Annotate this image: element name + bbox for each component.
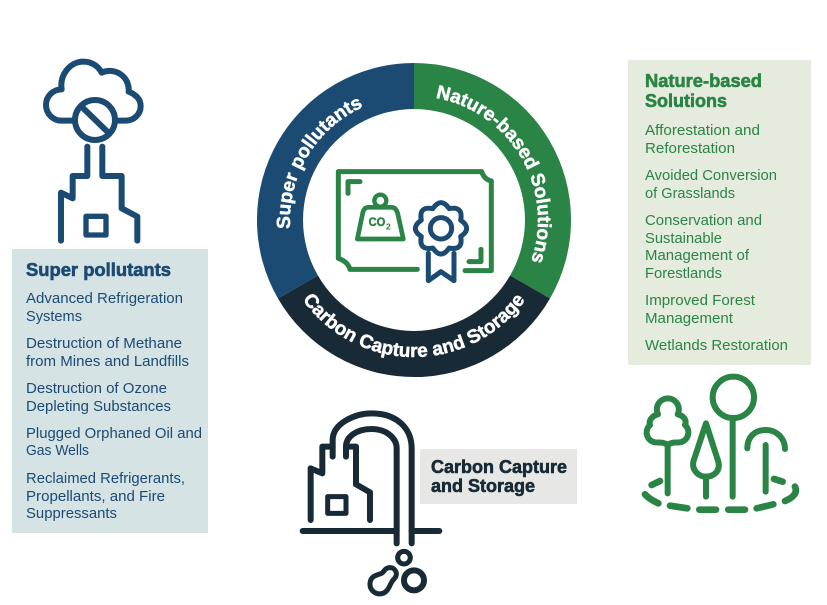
icon: factory with blocked cloud [46,62,141,241]
list: nature-based items: Sustainable [645,230,722,247]
list: super pollutants items: Gas Wells [26,442,89,459]
panel: carbon capture and storage [420,449,577,504]
list: nature-based items: Wetlands Restoration [645,337,788,354]
ring segment: nature-based solutions: Nature-based Solutions [436,85,552,263]
heading: carbon capture and storage: Carbon Capture [431,456,567,477]
ring diagram [256,63,572,377]
icon: CO2 weight: 2 [386,221,391,231]
list: nature-based items: Avoided Conversion [645,167,777,184]
certificate frame [338,172,491,271]
panel: super pollutants [12,249,208,533]
list: nature-based items: Conservation and [645,212,762,229]
ring segment: carbon capture and storage: Carbon Capture and Storage [304,294,524,358]
list: super pollutants items: Destruction of Ozone [26,380,167,397]
icon: carbon certificate [338,172,491,281]
list: super pollutants items: from Mines and Landfills [26,353,189,370]
list: nature-based items: Management [645,310,734,327]
list: super pollutants items: Propellants, and Fire [26,488,165,505]
list: nature-based items: Afforestation and [645,122,760,139]
icon: CO2 weight: CO [369,215,386,229]
list: nature-based items: Reforestation [645,140,735,157]
heading: carbon capture and storage: and Storage [431,475,535,496]
heading: nature-based solutions [645,70,762,111]
heading: super pollutants: Super pollutants [26,259,171,280]
icon: carbon capture facility [303,413,439,594]
list: nature-based items: of Grasslands [645,185,735,202]
ring segment: nature-based solutions [414,63,572,298]
list: super pollutants items: Systems [26,308,82,325]
ring segment: super pollutants: Super pollutants [276,99,362,229]
list: super pollutants items [26,290,202,522]
icon: trees on land [645,377,796,510]
panel: nature-based solutions [628,60,811,365]
list: nature-based items: Forestlands [645,265,722,282]
heading: nature-based solutions: Solutions [645,90,727,111]
list: nature-based items: Improved Forest [645,292,756,309]
ring segment: carbon capture and storage [278,276,550,377]
heading: nature-based solutions: Nature-based [645,70,762,91]
icon: rosette ribbon [415,203,467,281]
list: super pollutants items: Suppressants [26,505,117,522]
list: super pollutants items: Advanced Refrigeration [26,290,183,307]
list: super pollutants items: Plugged Orphaned Oil and [26,425,202,442]
list: super pollutants items: Destruction of Methane [26,335,182,352]
list: nature-based items: Management of [645,247,750,264]
list: super pollutants items: Reclaimed Refrigerants, [26,470,185,487]
ring segment: super pollutants [256,63,414,298]
icon: CO2 weight [357,195,403,239]
list: nature-based items [645,122,788,354]
list: super pollutants items: Depleting Substances [26,398,171,415]
heading: carbon capture and storage [431,456,567,496]
